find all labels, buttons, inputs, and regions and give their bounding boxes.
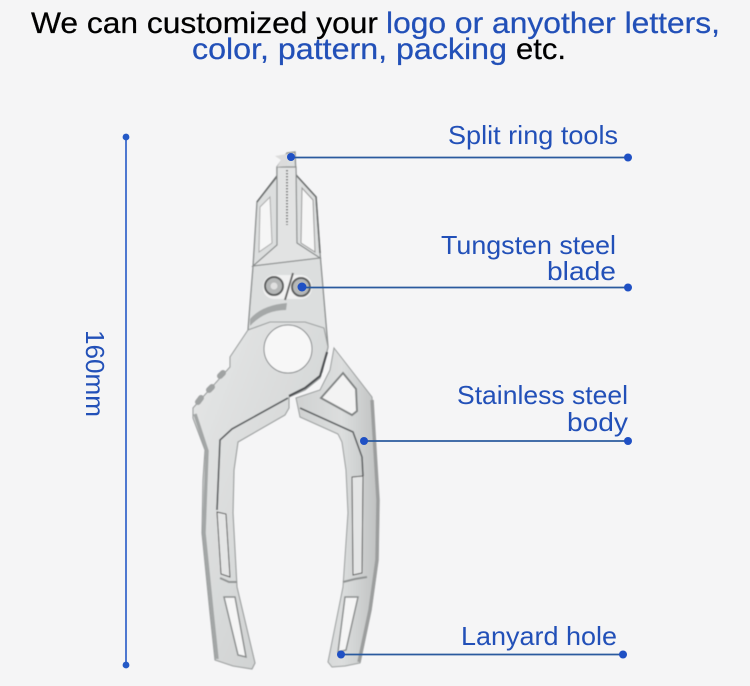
callout: tungsten steel blade: Tungsten steel: [441, 230, 616, 260]
screw plate: [263, 275, 312, 299]
left body and handle: [193, 322, 328, 669]
title: We can customized your: [31, 7, 378, 40]
right handle groove: [300, 408, 363, 476]
callout: tungsten steel blade: blade: [547, 256, 616, 286]
screw left: [265, 277, 283, 295]
title: logo or anyother letters,: [386, 7, 720, 40]
left handle groove: [217, 398, 288, 510]
triangular window: [321, 373, 357, 415]
slash groove: [285, 273, 293, 300]
callout: stainless steel body: [360, 380, 632, 445]
screw right: [292, 278, 310, 296]
right shoulder shading: [343, 577, 367, 582]
callout: stainless steel body: body: [567, 407, 628, 437]
left slot: [217, 512, 230, 577]
arc groove: [250, 303, 287, 326]
right jaw window: [301, 188, 315, 252]
jaw teeth: [286, 170, 288, 225]
right outer edge shading: [359, 400, 378, 662]
title: [31, 7, 720, 66]
left lower slot: [224, 597, 246, 657]
left outer edge shading: [195, 414, 217, 659]
left shoulder shading: [220, 578, 237, 582]
dimension line: 160mm: 160mm: [80, 330, 110, 417]
lanyard slot: [338, 597, 358, 652]
dimension line: 160mm: [80, 134, 129, 668]
title: color, pattern, packing: [192, 33, 507, 66]
callout: stainless steel body: Stainless steel: [457, 380, 628, 410]
pivot hole: [264, 325, 312, 373]
callout: lanyard hole: Lanyard hole: [461, 621, 617, 651]
callout: split ring tools: [287, 120, 632, 162]
callout: tungsten steel blade: [298, 230, 632, 292]
tip notch: [275, 154, 287, 167]
grip bumps: [198, 373, 223, 402]
title: etc.: [516, 33, 566, 66]
right handle: [296, 348, 379, 667]
left jaw window: [259, 197, 272, 252]
callout: split ring tools: Split ring tools: [448, 120, 618, 150]
callout: lanyard hole: [337, 621, 627, 658]
dark jaw outer edges: [257, 175, 320, 253]
pliers illustration: [193, 152, 379, 669]
right slot: [352, 476, 363, 575]
upper jaw: [248, 152, 328, 372]
